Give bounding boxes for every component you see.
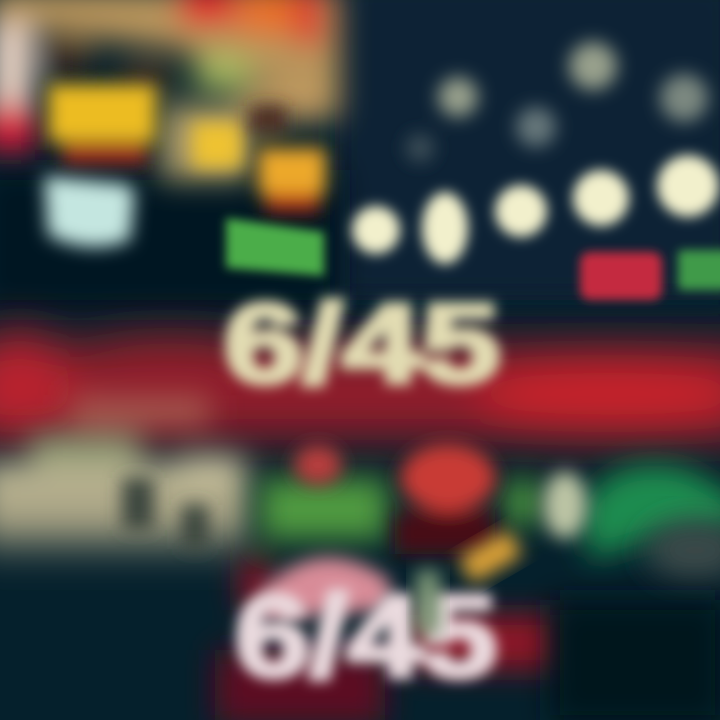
pale blue button bbox=[44, 176, 134, 247]
panel: colourful top-left tiles bbox=[0, 0, 340, 212]
red stage band bbox=[0, 329, 720, 441]
icon: green stem bbox=[416, 570, 440, 635]
title number: 6/45 bbox=[224, 281, 500, 406]
icon: red cap bbox=[294, 445, 342, 485]
red button bbox=[580, 252, 662, 300]
icon: dark figures bbox=[122, 478, 208, 549]
icon: right yellow tile bbox=[250, 106, 326, 212]
icon: yellow accent bbox=[458, 529, 523, 584]
faint ball row bbox=[406, 42, 708, 162]
pink arch bbox=[262, 557, 390, 620]
bottom number: 6/45 bbox=[235, 571, 497, 701]
icon: red figure bbox=[395, 444, 496, 554]
panel: beige card bottom-left bbox=[0, 395, 248, 572]
panel: green and red bottom centre bbox=[215, 444, 560, 720]
green button right bbox=[678, 250, 720, 290]
panel: green dome bottom-right bbox=[543, 465, 720, 720]
green button bbox=[226, 218, 324, 276]
bright ball row bbox=[352, 155, 719, 264]
icon: small yellow tile bbox=[192, 122, 242, 168]
icon: yellow tile bbox=[48, 84, 156, 164]
panel: number balls bbox=[352, 42, 719, 264]
